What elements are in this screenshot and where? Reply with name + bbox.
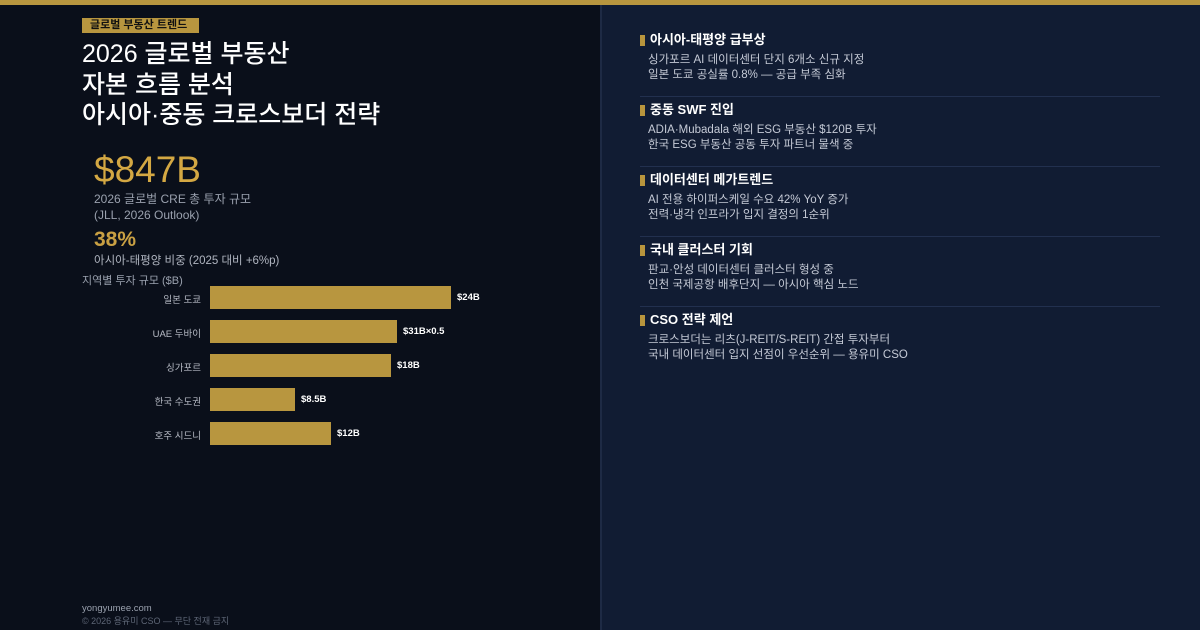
stat caption <box>94 192 251 222</box>
chart title: 지역별 투자 규모 ($B) <box>82 275 183 287</box>
section: domestic: 판교·안성 데이터센터 클러스터 형성 중 <box>648 264 834 276</box>
bar chart <box>153 286 480 445</box>
footer: © 2026 용유미 CSO — 무단 전재 금지 <box>82 616 229 626</box>
bar chart: $12B <box>337 428 360 439</box>
title <box>82 40 380 129</box>
bar chart: 호주 시드니 <box>155 431 201 442</box>
bar chart: $8.5B <box>301 394 326 405</box>
section: domestic: 국내 클러스터 기회 <box>650 242 753 257</box>
section: asia-pacific: 아시아-태평양 급부상 <box>650 32 766 47</box>
section: middle east: ADIA·Mubadala 해외 ESG 부동산 $120B 투자 <box>648 124 877 136</box>
section: middle east: 한국 ESG 부동산 공동 투자 파트너 물색 중 <box>648 139 853 151</box>
secondary caption: 아시아-태평양 비중 (2025 대비 +6%p) <box>94 255 279 267</box>
section: CSO: 국내 데이터센터 입지 선점이 우선순위 — 용유미 CSO <box>648 349 908 361</box>
tag: 글로벌 부동산 트렌드 <box>90 19 187 31</box>
section: data center: AI 전용 하이퍼스케일 수요 42% YoY 증가 <box>648 194 848 206</box>
section: data center: 데이터센터 메가트렌드 <box>650 172 773 187</box>
stat caption: 2026 글로벌 CRE 총 투자 규모 <box>94 192 251 206</box>
top bar <box>0 0 1200 5</box>
section: middle east: 중동 SWF 진입 <box>650 102 734 117</box>
bar chart: 싱가포르 <box>166 363 201 374</box>
section: CSO: 크로스보더는 리츠(J-REIT/S-REIT) 간접 투자부터 <box>648 334 890 346</box>
bar chart: $18B <box>397 360 420 371</box>
bar chart: UAE 두바이 <box>153 329 201 340</box>
tag <box>82 18 199 33</box>
section: domestic: 인천 국제공항 배후단지 — 아시아 핵심 노드 <box>648 279 859 291</box>
bar chart: $31B×0.5 <box>403 326 444 337</box>
bar chart: 한국 수도권 <box>155 397 201 408</box>
section: data center <box>640 172 848 221</box>
secondary stat: 38% <box>94 228 136 251</box>
section: asia-pacific <box>640 32 864 81</box>
section: CSO <box>640 312 908 361</box>
section: asia-pacific: 싱가포르 AI 데이터센터 단지 6개소 신규 지정 <box>648 54 864 66</box>
section: middle east <box>640 102 877 151</box>
footer: yongyumee.com <box>82 603 152 614</box>
section: domestic <box>640 242 859 291</box>
title: 자본 흐름 분석 <box>82 70 234 98</box>
section: asia-pacific: 일본 도쿄 공실률 0.8% — 공급 부족 심화 <box>648 69 846 81</box>
big stat: $847B <box>94 149 201 190</box>
bar chart: 일본 도쿄 <box>163 295 201 306</box>
right panel <box>602 0 1200 630</box>
left panel <box>0 0 600 630</box>
section: data center: 전력·냉각 인프라가 입지 결정의 1순위 <box>648 209 830 221</box>
footer <box>82 603 229 626</box>
stat caption: (JLL, 2026 Outlook) <box>94 208 199 222</box>
title: 2026 글로벌 부동산 <box>82 40 290 68</box>
divider <box>600 0 602 630</box>
section: CSO: CSO 전략 제언 <box>650 312 733 327</box>
bar chart: $24B <box>457 292 480 303</box>
title: 아시아·중동 크로스보더 전략 <box>82 101 380 129</box>
